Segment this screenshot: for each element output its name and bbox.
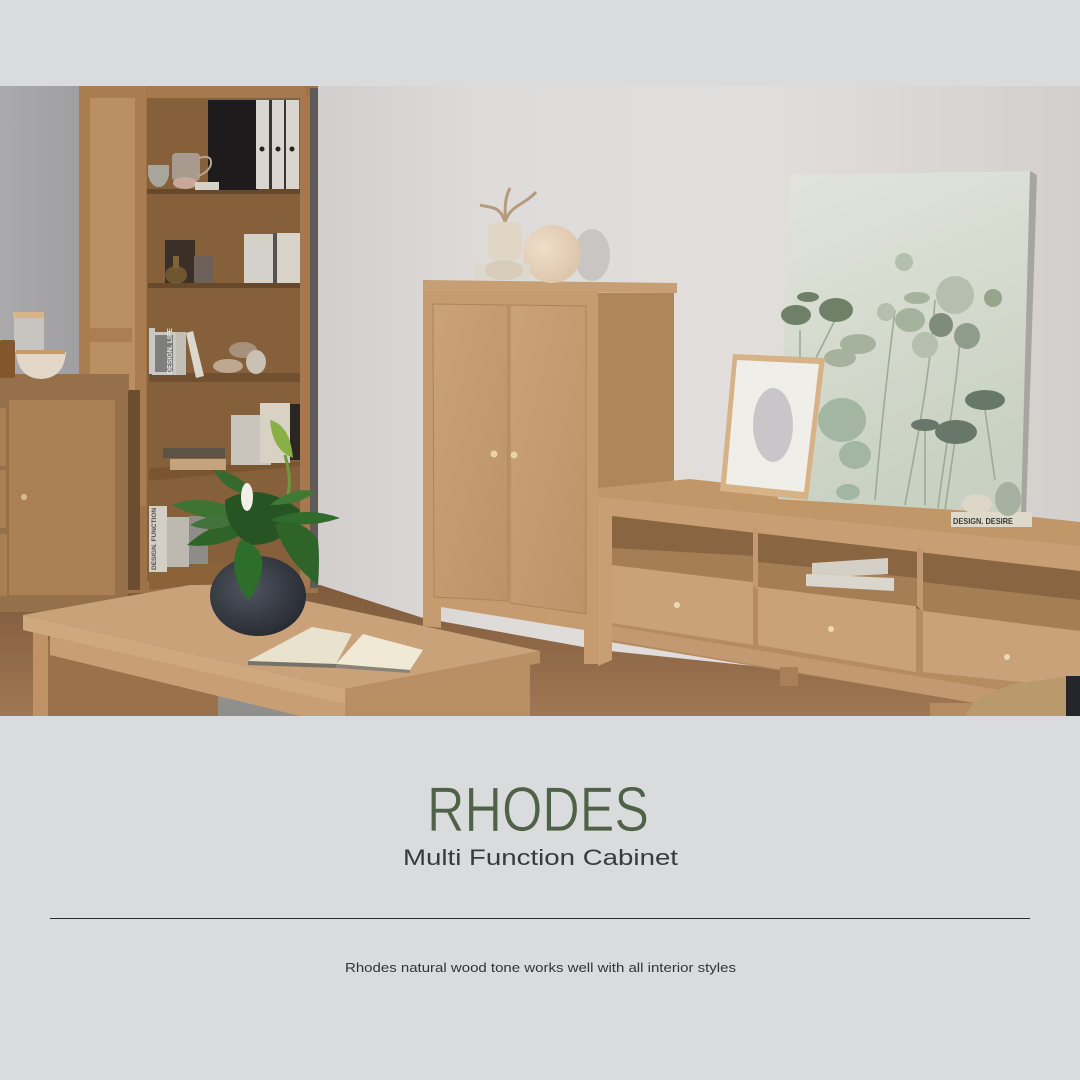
open book bbox=[248, 627, 423, 673]
wall background bbox=[0, 86, 1080, 716]
photo: living room scene with Rhodes furniture bbox=[0, 86, 1080, 716]
divider bbox=[50, 918, 1030, 919]
armchair corner bbox=[930, 676, 1080, 716]
shelf 2 objects bbox=[165, 240, 195, 283]
shelf 5 books bbox=[149, 506, 167, 572]
wooden floor bbox=[0, 585, 1080, 716]
description: Rhodes natural wood tone works well with all interior styles bbox=[345, 960, 737, 975]
cups bbox=[172, 153, 200, 181]
plant in a dark pot bbox=[172, 420, 340, 636]
coffee table bbox=[23, 585, 540, 716]
canvas: botanical painting bbox=[778, 171, 1037, 516]
spine label: DESIGN. FUNCTION bbox=[151, 508, 158, 570]
wall shadow bbox=[574, 229, 610, 281]
title: RHODES bbox=[427, 775, 649, 845]
small vases and book on console bbox=[951, 482, 1032, 527]
ceramic vases and books on the cabinet bbox=[480, 188, 536, 222]
flower stems bbox=[800, 300, 995, 510]
jars and bowl bbox=[14, 314, 44, 352]
picture frame bbox=[720, 354, 825, 500]
shelves bbox=[147, 189, 300, 194]
shelf interior bbox=[147, 96, 307, 581]
spine label: DESIGN. LIFE bbox=[167, 328, 174, 374]
shelf 4 objects bbox=[231, 415, 271, 465]
bookcase bbox=[79, 86, 318, 593]
book label: DESIGN. DESIRE bbox=[953, 516, 1013, 526]
sideboard bbox=[0, 312, 129, 612]
shelf 3 objects bbox=[149, 328, 155, 374]
console books bbox=[812, 558, 888, 578]
cabinet: Rhodes two door bbox=[423, 188, 677, 664]
TV console bbox=[598, 479, 1080, 703]
binders bbox=[208, 100, 258, 190]
subtitle: Multi Function Cabinet bbox=[403, 845, 678, 870]
drawers bbox=[612, 565, 753, 645]
